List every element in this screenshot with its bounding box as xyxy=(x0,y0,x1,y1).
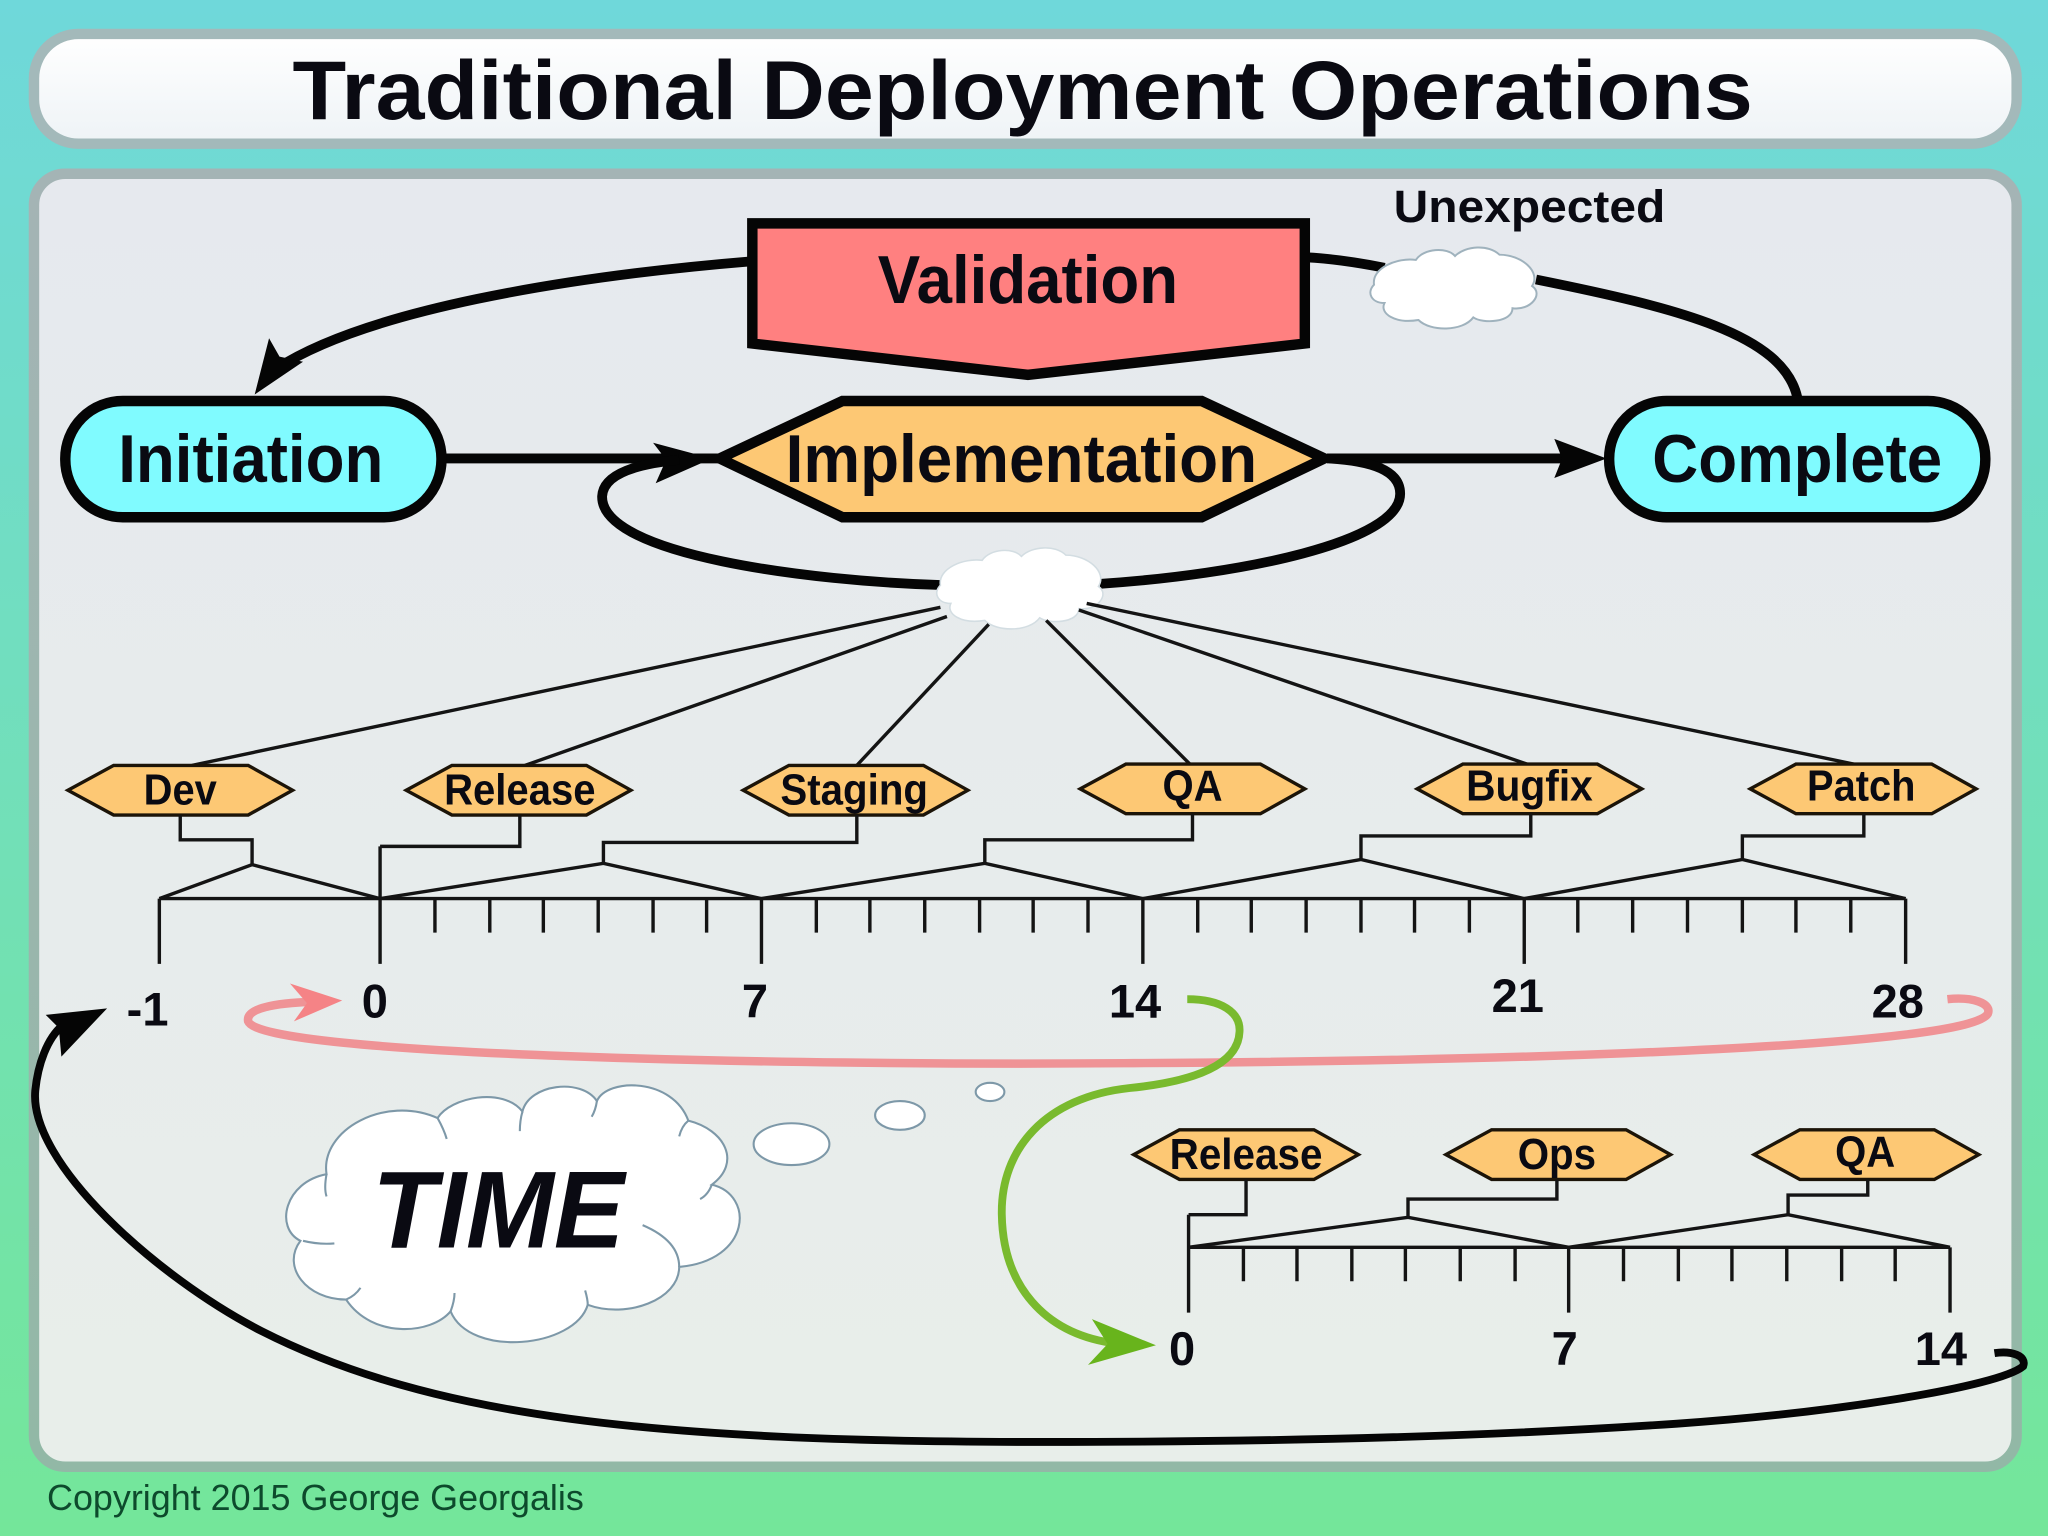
TIME label: TIME xyxy=(372,1149,627,1271)
upper timeline labels: -1 xyxy=(127,982,168,1035)
phase tag: Release: Release xyxy=(444,767,596,815)
arrow: pink repeat cycle xyxy=(248,984,1988,1064)
title: Traditional Deployment Operations xyxy=(293,43,1753,137)
copyright: Copyright 2015 George Georgalis xyxy=(47,1477,584,1518)
upper timeline ruler xyxy=(159,814,1906,964)
phase tag: QA: QA xyxy=(1162,763,1223,811)
phase tag: Dev xyxy=(68,765,293,815)
initiation label: Initiation xyxy=(118,422,383,497)
validation label: Validation xyxy=(878,243,1178,318)
phase tag: Staging: Staging xyxy=(780,767,928,815)
validation box xyxy=(752,223,1305,375)
unexpected cloud xyxy=(1370,247,1537,329)
upper timeline labels: 21 xyxy=(1492,969,1544,1022)
phase tag: Bugfix xyxy=(1417,763,1642,814)
lines from cloud to phases xyxy=(192,603,1860,765)
phase tag: Patch xyxy=(1750,763,1976,814)
next cycle tag: Release: Release xyxy=(1170,1131,1322,1179)
arrow: black back to start xyxy=(35,1008,2024,1442)
arrow: initiation to implementation xyxy=(441,443,718,483)
phase tag: Patch: Patch xyxy=(1807,763,1915,811)
arrow: validation back to initiation xyxy=(255,261,752,394)
thought bubbles xyxy=(754,1083,1004,1165)
arrow: validation to complete through unexpected cloud xyxy=(1306,257,1797,397)
implementation cloud xyxy=(937,548,1103,629)
unexpected label: Unexpected xyxy=(1394,181,1665,232)
upper timeline labels: 7 xyxy=(742,974,768,1027)
implementation label: Implementation xyxy=(786,422,1257,497)
TIME thought cloud xyxy=(286,1085,740,1342)
upper timeline labels: 14 xyxy=(1109,974,1161,1027)
lower timeline labels: 14 xyxy=(1915,1322,1967,1375)
next cycle tag: Ops: Ops xyxy=(1518,1131,1596,1179)
initiation node xyxy=(65,401,441,517)
upper timeline labels: 28 xyxy=(1872,974,1924,1027)
lower timeline ruler xyxy=(1189,1179,1950,1313)
implementation node xyxy=(720,401,1324,517)
lower timeline labels xyxy=(1169,1322,1967,1375)
lower timeline labels: 7 xyxy=(1552,1322,1578,1375)
upper timeline labels xyxy=(127,969,1924,1035)
phase tag: Dev: Dev xyxy=(144,767,217,815)
arrow: green to next release xyxy=(1002,999,1240,1365)
next cycle tag: Ops xyxy=(1446,1130,1671,1179)
phase tag: Staging xyxy=(743,765,968,815)
title panel xyxy=(34,34,2017,144)
next cycle tag: QA: QA xyxy=(1835,1128,1895,1176)
phase tag: QA xyxy=(1080,763,1305,814)
implementation rework loop xyxy=(602,458,1400,585)
next cycle tag: QA xyxy=(1754,1128,1979,1179)
arrow: implementation to complete xyxy=(1327,439,1607,478)
phase tag: Bugfix: Bugfix xyxy=(1466,763,1593,811)
complete node xyxy=(1609,401,1985,517)
upper timeline labels: 0 xyxy=(362,974,388,1027)
lower timeline labels: 0 xyxy=(1169,1322,1195,1375)
complete label: Complete xyxy=(1652,422,1942,497)
